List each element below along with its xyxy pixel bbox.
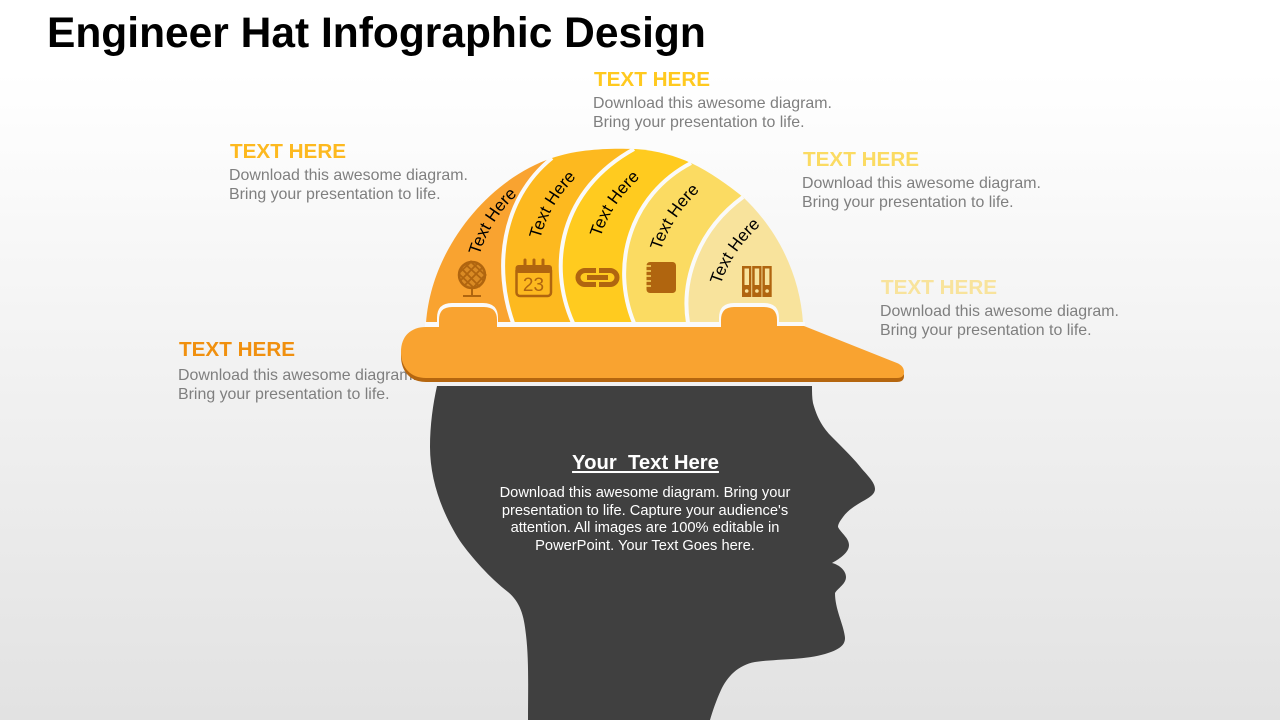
head caption: Your Text Here [572,452,719,474]
white band above brim [425,322,805,328]
segment label 3: Text Here [590,173,638,234]
brim [401,307,904,378]
hat segment 4 [624,163,760,323]
segment label 4: Text Here [650,186,698,247]
head caption [500,452,791,554]
text block: upper left: Download this awesome diagram. [229,167,468,184]
text block: left: Download this awesome diagram. [178,367,417,384]
icon: calendar: 23 [523,275,544,296]
title: Engineer Hat Infographic Design [47,10,706,57]
brim shadow [401,331,904,382]
text block: top centre: TEXT HERE [594,68,710,91]
segment label 2: Text Here [528,173,574,236]
head caption: Download this awesome diagram. Bring your [500,485,791,501]
text block: top centre [593,68,832,131]
text block: left [178,338,417,403]
head caption: PowerPoint. Your Text Goes here. [535,538,755,554]
hat segment 1 [426,158,600,323]
icon: notebook [646,262,676,293]
icon: binders [742,266,772,297]
text block: right: Bring your presentation to life. [880,322,1092,339]
text block: upper left: Bring your presentation to life. [229,186,441,203]
text block: upper right: Download this awesome diagram. [802,175,1041,192]
segment label 5: Text Here [710,220,759,281]
head caption: presentation to life. Capture your audience's [502,503,788,519]
segment dividers [503,149,743,323]
text block: right: Download this awesome diagram. [880,303,1119,320]
text block: left: TEXT HERE [179,338,295,361]
text block: upper left [229,140,468,203]
text block: upper right: Bring your presentation to life. [802,194,1014,211]
icon: globe [459,261,486,296]
text block: left: Bring your presentation to life. [178,386,390,403]
text block: top centre: Bring your presentation to life. [593,114,805,131]
text block: upper left: TEXT HERE [230,140,346,163]
engineer hat [401,148,904,382]
head caption: attention. All images are 100% editable in [511,520,779,536]
text block: upper right: TEXT HERE [803,148,919,171]
icon: chain link [578,270,617,284]
right hat tab outline [719,303,779,327]
hat segment 5 [686,197,803,323]
head silhouette [430,386,875,720]
left hat tab outline [437,303,498,327]
text block: right [880,276,1119,339]
text block: top centre: Download this awesome diagram. [593,95,832,112]
text block: right: TEXT HERE [881,276,997,299]
hat segment 3 [561,149,710,323]
icon: calendar [516,260,552,296]
hat segment 2 [503,149,660,323]
segment label 1: Text Here [468,190,516,252]
text block: upper right [802,148,1041,211]
